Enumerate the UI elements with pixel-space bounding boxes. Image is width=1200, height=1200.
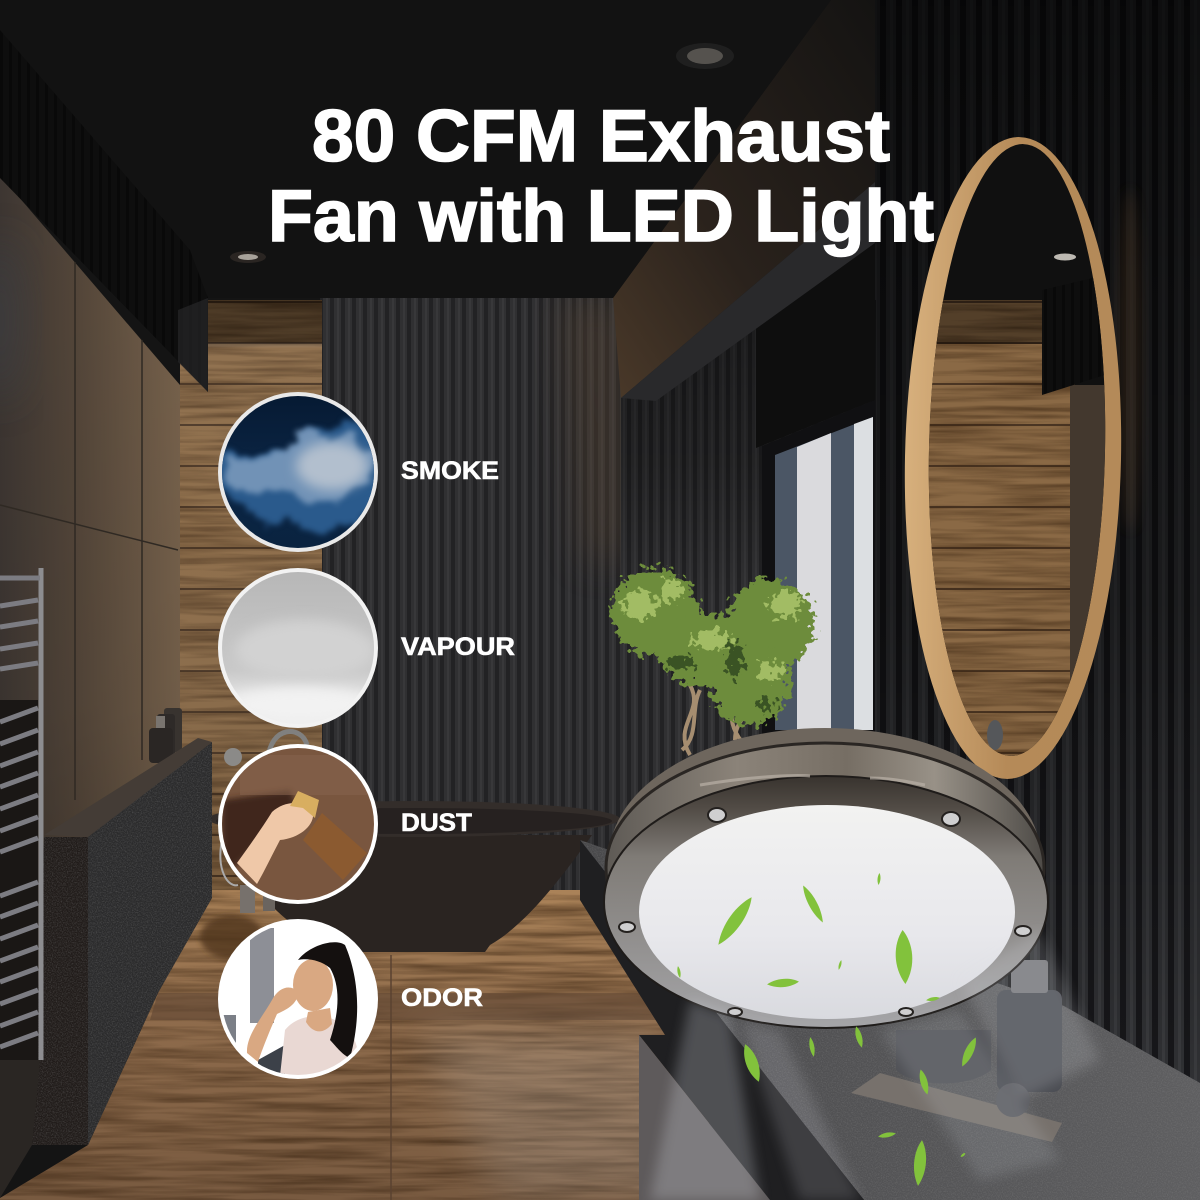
bathtub — [208, 801, 620, 952]
back wall wood planks — [180, 300, 322, 900]
ceiling — [0, 0, 831, 298]
label: dust: DUST — [401, 809, 472, 837]
dark box above window — [756, 243, 875, 448]
plant — [611, 568, 814, 755]
tub faucet and shower — [220, 731, 307, 913]
label: odor: ODOR — [401, 984, 483, 1012]
fan middle band — [606, 743, 1044, 993]
left wall panels — [0, 175, 180, 1060]
rim screws — [619, 808, 1031, 1016]
icon: odor photo — [218, 919, 378, 1079]
stone ledge — [0, 738, 212, 1198]
flying leaves — [677, 873, 980, 1186]
counter accessories — [851, 960, 1062, 1142]
window — [762, 400, 875, 735]
label: vapour: VAPOUR — [401, 633, 515, 661]
item: smoke — [210, 392, 499, 552]
right ribbed wall — [621, 0, 1200, 1100]
air flow rays — [650, 930, 1100, 1200]
item: odor — [218, 919, 483, 1079]
icon: smoke photo — [218, 392, 378, 552]
frosted glass lens — [639, 805, 1015, 1019]
ceiling spotlights — [230, 43, 734, 263]
title: Fan with LED Light — [268, 176, 934, 257]
shelf bottles — [149, 708, 182, 763]
lower counter — [580, 840, 1200, 1200]
title — [268, 96, 934, 257]
fan trim ring — [604, 776, 1048, 1028]
round wood mirror — [898, 135, 1142, 781]
floor — [0, 890, 720, 1200]
stone beam — [621, 182, 875, 401]
title: 80 CFM Exhaust — [312, 96, 890, 177]
back wall ribbed panel — [320, 298, 625, 898]
item: vapour — [218, 568, 515, 728]
icon: vapour photo — [218, 568, 378, 728]
item: dust — [218, 744, 472, 904]
left soffit — [0, 30, 208, 392]
warm lit wall above beam — [613, 0, 875, 398]
towel rail — [0, 568, 41, 1060]
fan back body — [609, 728, 1041, 988]
label: smoke: SMOKE — [401, 457, 499, 485]
exhaust fan with LED light — [604, 728, 1100, 1200]
icon: dust photo — [218, 744, 378, 904]
